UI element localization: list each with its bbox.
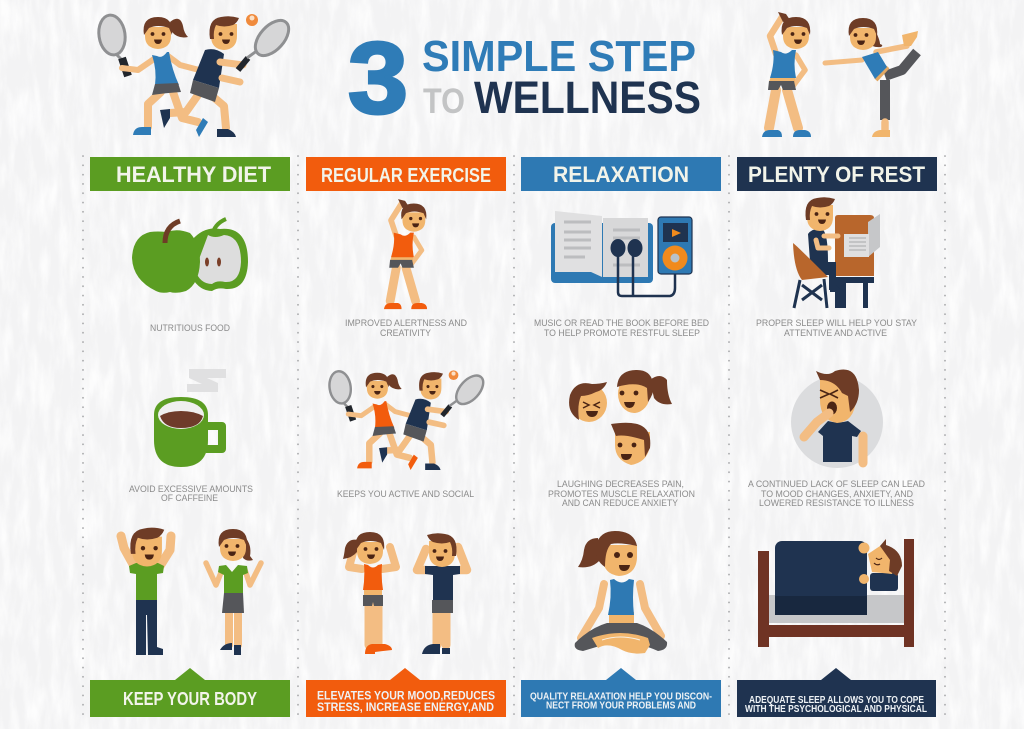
illustration: tennis players — [96, 13, 295, 137]
caption: music or book — [534, 318, 709, 338]
caption: active and social: KEEPS YOU ACTIVE AND SOCIAL — [337, 489, 474, 499]
caption: lack of sleep: LOWERED RESISTANCE TO ILLNESS — [759, 498, 914, 508]
caption: laughing: AND CAN REDUCE ANXIETY — [562, 498, 678, 508]
caption: laughing — [548, 479, 695, 508]
decorative dotted column rules — [83, 156, 945, 718]
illustration: flexing man — [417, 533, 467, 654]
heading: healthy diet: HEALTHY DIET — [116, 162, 272, 187]
icon: apple — [132, 219, 248, 293]
caption: caffeine — [129, 484, 253, 503]
icon: coffee mug — [154, 369, 226, 467]
caption: lack of sleep: A CONTINUED LACK OF SLEEP CAN LEAD — [748, 479, 925, 489]
icon: book and music player — [551, 211, 692, 296]
laughing man face — [569, 382, 607, 422]
caption: alertness: CREATIVITY — [380, 328, 431, 338]
illustration: yawning man — [791, 370, 883, 468]
heading: healthy diet — [90, 157, 290, 191]
icon: laughing faces — [569, 370, 672, 465]
heading: relaxation — [521, 157, 721, 191]
bottom callout: elevates your mood: STRESS, INCREASE ENERGY,AND — [317, 700, 494, 714]
panel: regular exercise — [306, 157, 506, 717]
panel: plenty of rest — [737, 157, 937, 717]
caption: laughing: LAUGHING DECREASES PAIN, — [557, 479, 684, 489]
heading: plenty of rest — [737, 157, 937, 191]
illustration: flexing woman — [343, 532, 396, 654]
illustration: tennis players orange — [327, 370, 488, 470]
bottom callout: elevates your mood — [306, 668, 506, 717]
caption: lack of sleep — [748, 479, 925, 508]
caption: music or book: MUSIC OR READ THE BOOK BEFORE BED — [534, 318, 709, 328]
bottom callout: quality relaxation — [521, 668, 721, 717]
caption: music or book: TO HELP PROMOTE RESTFUL SLEEP — [544, 328, 700, 338]
heading: plenty of rest: PLENTY OF REST — [748, 162, 926, 187]
panel: relaxation — [521, 157, 721, 717]
title: 3 — [348, 23, 408, 135]
bottom callout: adequate sleep — [737, 668, 936, 717]
caption: proper sleep — [756, 318, 917, 338]
illustration: man sleeping in bed — [758, 539, 914, 647]
title — [348, 23, 701, 135]
illustration: meditating woman — [575, 531, 667, 654]
illustration: cheering man — [121, 528, 171, 655]
title: TO — [423, 82, 465, 121]
caption: alertness — [345, 318, 467, 338]
illustration: yoga pose woman — [825, 18, 918, 137]
bottom callout: keep your body: KEEP YOUR BODY — [123, 689, 257, 709]
heading: regular exercise — [306, 157, 506, 191]
panel: healthy diet — [90, 157, 290, 717]
bottom callout: quality relaxation: QUALITY RELAXATION HELP YOU DISCON- — [530, 692, 712, 702]
title: SIMPLE STEP — [422, 32, 696, 81]
heading: relaxation: RELAXATION — [553, 162, 689, 187]
caption: laughing: PROMOTES MUSCLE RELAXATION — [548, 489, 695, 499]
smiling man face — [611, 423, 650, 465]
caption: nutritious food: NUTRITIOUS FOOD — [150, 323, 230, 333]
caption: proper sleep: PROPER SLEEP WILL HELP YOU STAY — [756, 318, 917, 328]
bottom callout: adequate sleep: ADEQUATE SLEEP ALLOWS YOU TO COPE — [749, 695, 924, 706]
caption: proper sleep: ATTENTIVE AND ACTIVE — [784, 328, 887, 338]
heading: regular exercise: REGULAR EXERCISE — [321, 165, 491, 187]
illustration: man at desk with laptop — [793, 197, 880, 308]
illustration: cheering woman — [206, 529, 261, 655]
caption: alertness: IMPROVED ALERTNESS AND — [345, 318, 467, 328]
bottom callout: keep your body — [90, 668, 290, 717]
illustration: stretching woman orange — [384, 199, 427, 309]
bottom callout: quality relaxation: NECT FROM YOUR PROBLEMS AND — [546, 700, 696, 712]
illustration: stretching woman — [762, 12, 811, 137]
title: WELLNESS — [474, 72, 701, 123]
laughing woman face — [617, 370, 672, 413]
caption: caffeine: OF CAFFEINE — [161, 493, 218, 503]
bottom callout: elevates your mood: ELEVATES YOUR MOOD,REDUCES — [317, 688, 495, 702]
caption: lack of sleep: TO MOOD CHANGES, ANXIETY, AND — [761, 489, 913, 499]
caption: caffeine: AVOID EXCESSIVE AMOUNTS — [129, 484, 253, 494]
